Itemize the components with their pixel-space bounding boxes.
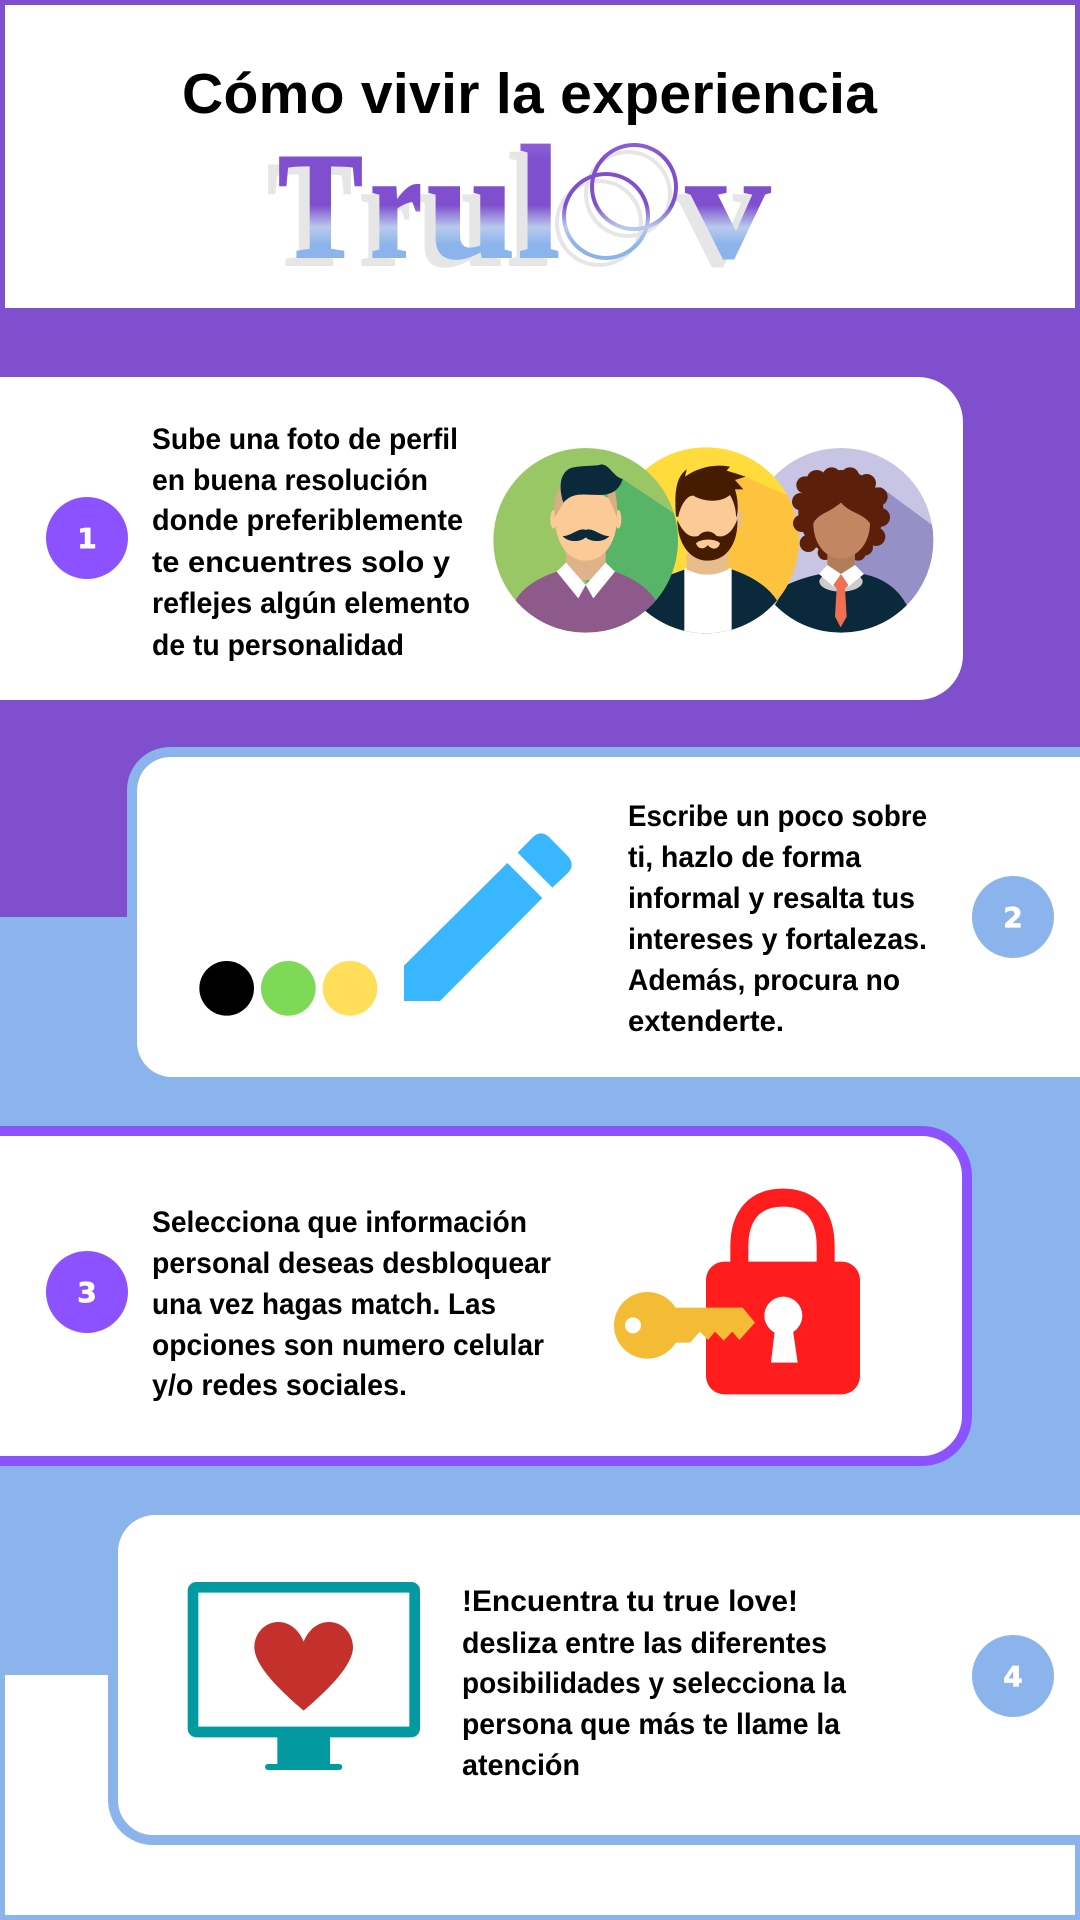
- step 4 text: !Encuentra tu true love!: [462, 1585, 798, 1618]
- panel: step 4: [113, 1515, 1080, 1840]
- step 2 number badge: 2: [1003, 901, 1023, 934]
- logo: Truloov wordmark: T: [267, 130, 352, 298]
- logo: Truloov wordmark: r: [370, 122, 422, 290]
- step 3 text: opciones son numero celular: [152, 1329, 544, 1362]
- panel: step 3: [0, 1131, 967, 1461]
- logo: Truloov wordmark: l: [507, 122, 549, 301]
- step 3 text: [152, 1206, 551, 1402]
- step 1 text: te encuentres solo y: [152, 546, 451, 579]
- icon: monitor with heart: [193, 1587, 415, 1770]
- icon: three profile avatars: [490, 447, 937, 643]
- step 1 text: [152, 423, 470, 662]
- header panel: [2, 2, 1078, 310]
- logo: Truloov wordmark: u: [427, 122, 515, 290]
- logo: Truloov wordmark: v: [675, 130, 759, 298]
- step 1 text: Sube una foto de perfil: [152, 423, 458, 456]
- step 3 number badge: 3: [77, 1276, 97, 1309]
- step 1 text: donde preferiblemente: [152, 504, 463, 537]
- step 2 text: intereses y fortalezas.: [628, 923, 927, 956]
- step 4 text: persona que más te llame la: [462, 1708, 841, 1741]
- logo: Truloov wordmark: v: [686, 122, 770, 290]
- step 1 number badge: 1: [77, 522, 97, 555]
- step 4 text: posibilidades y selecciona la: [462, 1667, 847, 1700]
- background: purple upper band: [0, 300, 1080, 917]
- step 3 text: personal deseas desbloquear: [152, 1247, 551, 1280]
- step 1 text: reflejes algún elemento: [152, 587, 470, 620]
- logo: Truloov wordmark: T: [278, 122, 363, 290]
- icon: padlock and key: [614, 1198, 860, 1394]
- logo: Truloov wordmark: u: [416, 130, 504, 298]
- icon: colour dots and pencil: [199, 833, 572, 1016]
- step 4 text: [462, 1585, 847, 1782]
- logo: Truloov wordmark: [267, 114, 770, 301]
- step 4 number badge: 4: [1003, 1660, 1023, 1693]
- step 4 text: desliza entre las diferentes: [462, 1627, 827, 1660]
- step 2 text: ti, hazlo de forma: [628, 841, 862, 874]
- step 2 text: informal y resalta tus: [628, 882, 915, 915]
- logo: Truloov wordmark: l: [518, 114, 560, 293]
- panel: step 2: [132, 752, 1080, 1077]
- step 1 number badge: [46, 497, 128, 579]
- step 3 number badge: [46, 1251, 128, 1333]
- step 2 text: [628, 800, 927, 1038]
- step 3 text: y/o redes sociales.: [152, 1369, 407, 1402]
- title: Cómo vivir la experiencia: [182, 62, 878, 126]
- step 1 text: de tu personalidad: [152, 629, 404, 662]
- bottom white frame panel: [5, 1675, 1075, 1915]
- step 1 text: en buena resolución: [152, 464, 428, 497]
- step 2 text: Además, procura no: [628, 964, 900, 997]
- step 3 text: una vez hagas match. Las: [152, 1288, 496, 1321]
- logo: Truloov wordmark: r: [359, 130, 411, 298]
- step 3 text: Selecciona que información: [152, 1206, 527, 1239]
- step 4 text: atención: [462, 1749, 580, 1782]
- background: blue lower band: [0, 917, 1080, 1920]
- step 4 number badge: [972, 1635, 1054, 1717]
- panel: step 1: [0, 377, 963, 700]
- step 2 text: Escribe un poco sobre: [628, 800, 927, 833]
- step 2 number badge: [972, 876, 1054, 958]
- step 2 text: extenderte.: [628, 1005, 784, 1038]
